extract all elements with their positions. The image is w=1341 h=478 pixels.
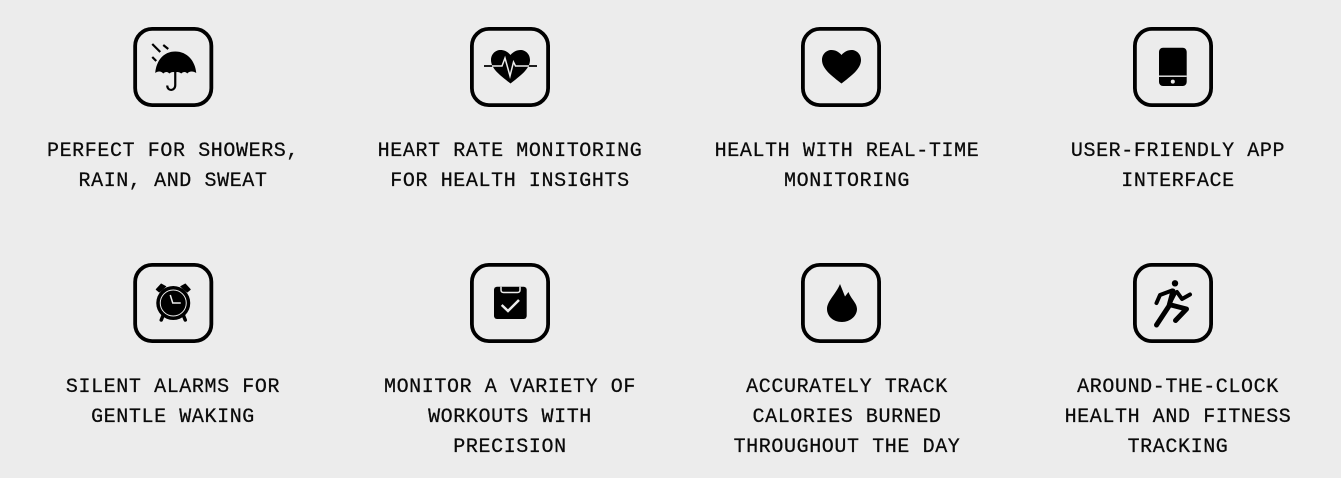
text: tracking: AROUND-THE-CLOCK xyxy=(1077,376,1279,399)
text: alarms: GENTLE WAKING xyxy=(91,406,255,429)
text: showers xyxy=(47,140,299,193)
text: alarms xyxy=(66,376,280,429)
text: app: USER-FRIENDLY APP xyxy=(1071,140,1285,163)
icon: alarm clock xyxy=(133,263,214,343)
icon: heart rate xyxy=(470,27,550,107)
text: heart rate xyxy=(378,140,642,193)
text: calories xyxy=(734,376,960,459)
text: app xyxy=(1071,140,1285,193)
icon: umbrella with rain xyxy=(133,27,214,107)
text: health: HEALTH WITH REAL-TIME xyxy=(715,140,979,163)
text: tracking xyxy=(1065,376,1291,459)
text: showers: PERFECT FOR SHOWERS, xyxy=(47,140,299,163)
icon: heart xyxy=(801,27,881,107)
text: workouts: MONITOR A VARIETY OF xyxy=(384,376,636,399)
icon: runner xyxy=(1133,263,1213,343)
text: showers: RAIN, AND SWEAT xyxy=(78,170,268,193)
text: alarms: SILENT ALARMS FOR xyxy=(66,376,280,399)
icon: phone xyxy=(1133,27,1213,107)
text: tracking: HEALTH AND FITNESS xyxy=(1065,406,1291,429)
text: heart rate: HEART RATE MONITORING xyxy=(378,140,642,163)
text: app: INTERFACE xyxy=(1121,170,1235,193)
text: health: MONITORING xyxy=(784,170,910,193)
text: workouts: WORKOUTS WITH xyxy=(428,406,592,429)
text: calories: THROUGHOUT THE DAY xyxy=(734,436,960,459)
text: health xyxy=(715,140,979,193)
text: tracking: TRACKING xyxy=(1128,436,1228,459)
text: workouts: PRECISION xyxy=(453,436,567,459)
text: calories: ACCURATELY TRACK xyxy=(746,376,948,399)
icon: flame drop xyxy=(801,263,881,343)
text: heart rate: FOR HEALTH INSIGHTS xyxy=(390,170,630,193)
text: calories: CALORIES BURNED xyxy=(752,406,942,429)
icon: clipboard check xyxy=(470,263,550,343)
text: workouts xyxy=(384,376,636,459)
